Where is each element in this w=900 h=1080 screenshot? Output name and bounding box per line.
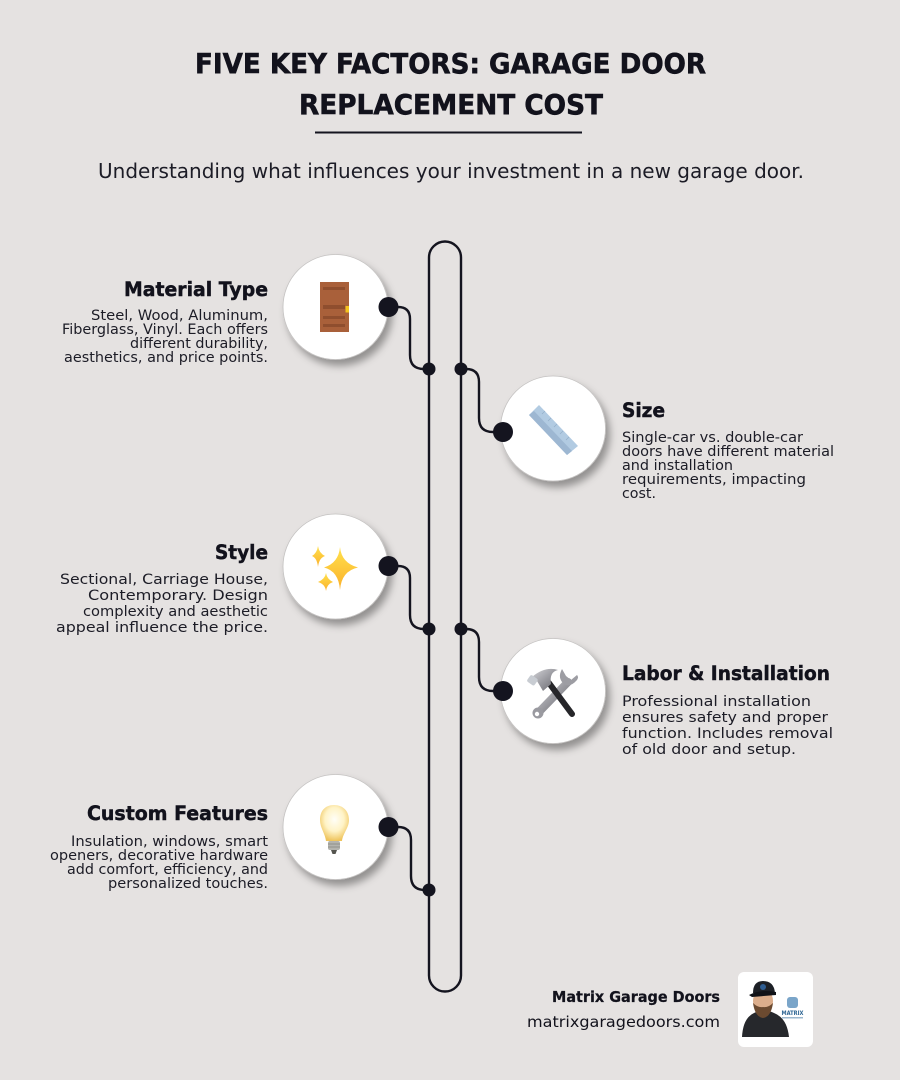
text: style description: appeal influence the price. [56, 620, 268, 636]
text: style description: Sectional, Carriage House, [60, 572, 268, 588]
footer: brand [527, 972, 813, 1047]
text: material type description: Fiberglass, Vinyl. Each offers [62, 322, 268, 338]
heading: size: Size [622, 399, 665, 422]
text: material type description: aesthetics, and price points. [64, 350, 268, 366]
logo card with mascot [738, 972, 813, 1047]
icon: door [320, 282, 349, 332]
text: style description: complexity and aesthetic [83, 604, 268, 620]
panel: labor and installation [454, 622, 833, 758]
icon: hammer and wrench [526, 669, 578, 718]
icon: ruler [529, 405, 578, 455]
heading: material type: Material Type [124, 278, 268, 301]
connector: style [389, 566, 429, 629]
text: custom features description: personalized touches. [108, 876, 268, 892]
text: labor description: function. Includes removal [622, 726, 833, 742]
text: material type description [62, 308, 268, 366]
icon: light bulb [320, 805, 349, 854]
text: labor description [622, 694, 833, 758]
text: custom features description [50, 834, 268, 892]
panel: custom features [50, 774, 436, 896]
connector: material type [389, 307, 429, 369]
text: size description: requirements, impacting [622, 472, 806, 488]
logo card with mascot: MATRIX [782, 1009, 804, 1017]
panel: size [454, 362, 834, 502]
text: custom features description: openers, decorative hardware [50, 848, 268, 864]
subtitle: Understanding what influences your investment in a new garage door. [98, 159, 804, 183]
text: custom features description: Insulation, windows, smart [71, 834, 268, 850]
title: REPLACEMENT COST [299, 88, 603, 121]
text: size description [622, 430, 834, 502]
icon: sparkles [312, 546, 358, 591]
text: labor description: of old door and setup. [622, 742, 796, 758]
brand name: Matrix Garage Doors [552, 988, 720, 1006]
text: size description: Single-car vs. double-car [622, 430, 803, 446]
text: material type description: Steel, Wood, Aluminum, [91, 308, 268, 324]
title: FIVE KEY FACTORS: GARAGE DOOR [195, 47, 706, 80]
text: labor description: Professional installation [622, 694, 811, 710]
text: size description: and installation [622, 458, 733, 474]
heading: style: Style [215, 541, 268, 564]
heading: custom features: Custom Features [87, 802, 268, 825]
text: style description: Contemporary. Design [88, 588, 268, 604]
panel: style [56, 514, 436, 636]
central timeline track [429, 242, 461, 992]
text: style description [56, 572, 268, 636]
title [195, 47, 706, 121]
connector: size [461, 369, 503, 432]
text: size description: cost. [622, 486, 656, 502]
text: labor description: ensures safety and proper [622, 710, 828, 726]
panel: material type [62, 254, 436, 376]
text: custom features description: add comfort, efficiency, and [67, 862, 268, 878]
connector: labor [461, 629, 503, 691]
text: size description: doors have different material [622, 444, 834, 460]
text: material type description: different durability, [130, 336, 268, 352]
heading: labor and installation: Labor & Installation [622, 662, 830, 685]
brand url: matrixgaragedoors.com [527, 1013, 720, 1031]
connector: custom features [389, 827, 429, 890]
